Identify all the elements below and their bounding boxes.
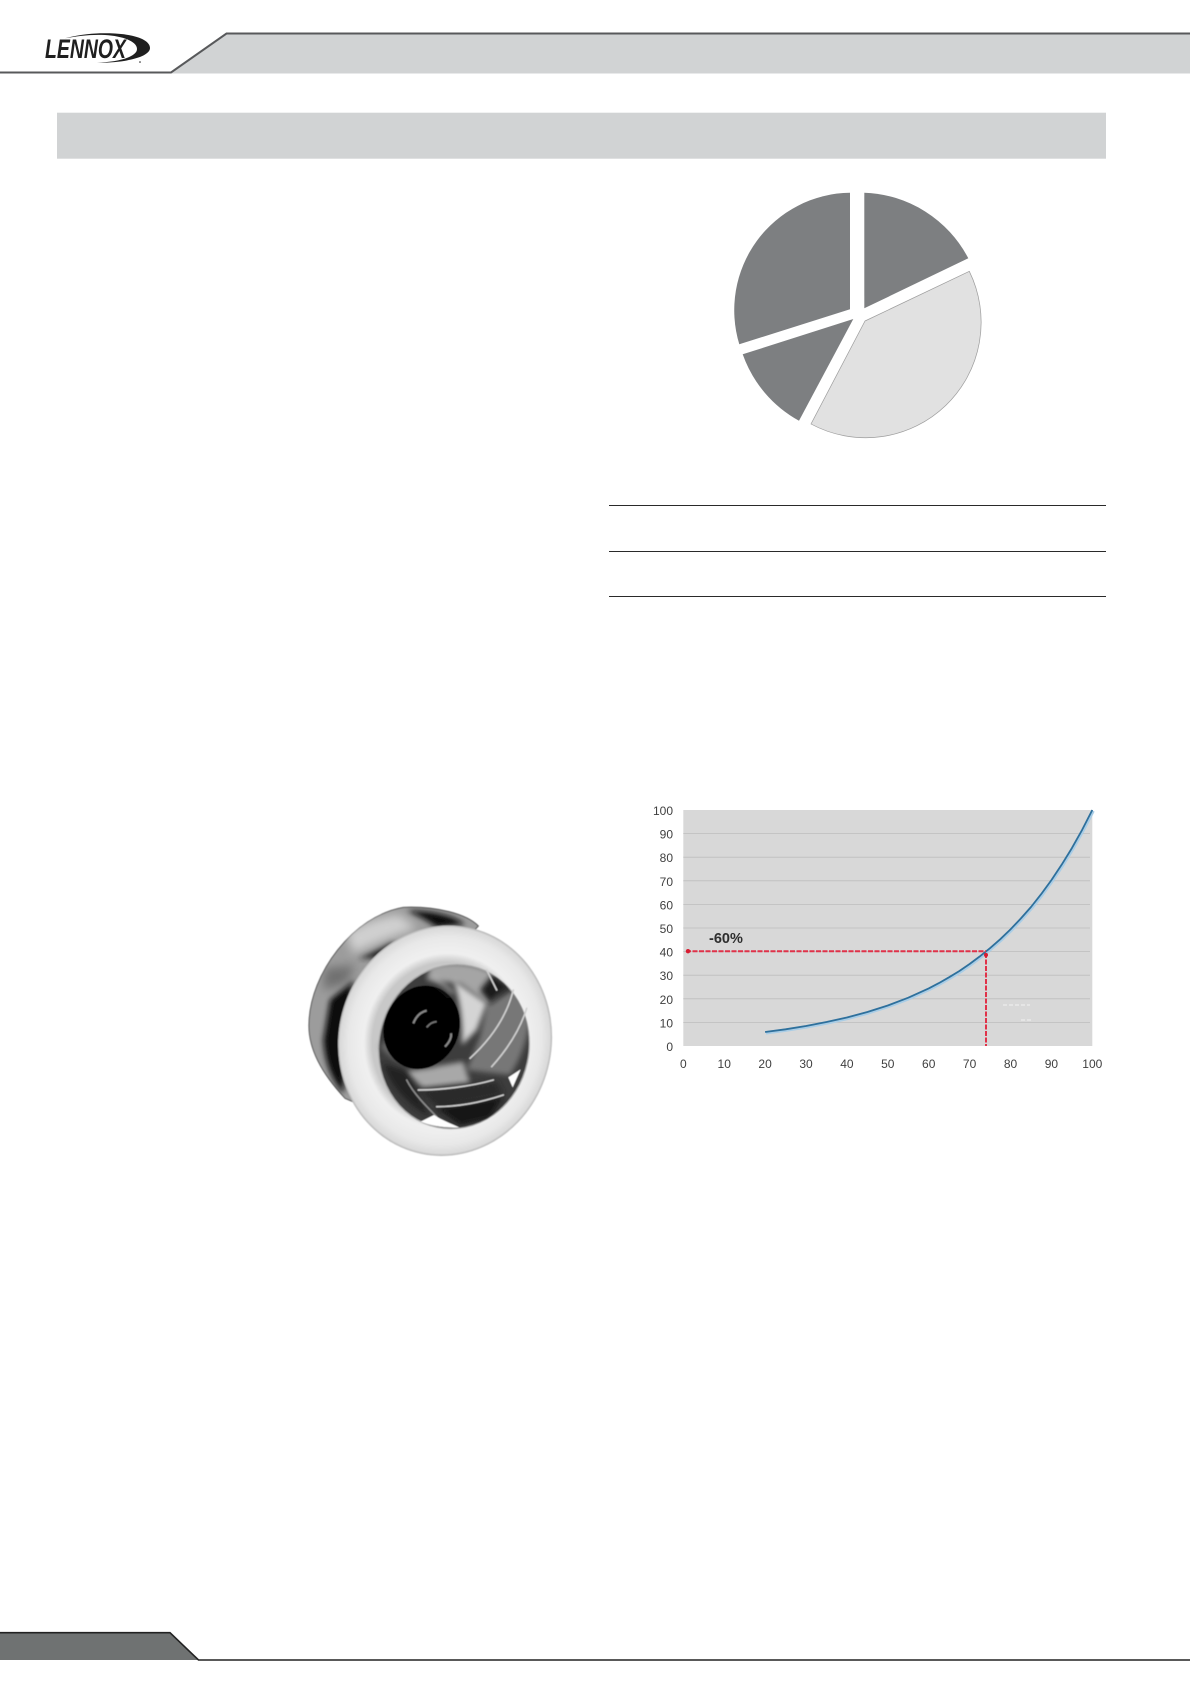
savings curve — [765, 810, 1093, 1033]
red dashed guides — [686, 951, 986, 1046]
x axis labels: 60 — [922, 1057, 936, 1071]
y axis labels: 70 — [660, 875, 673, 889]
callout: -60%: -60% — [709, 931, 743, 947]
fan blade gaps — [421, 1069, 521, 1128]
y axis labels: 0 — [666, 1040, 673, 1054]
faint label remnant — [1003, 1005, 1031, 1020]
grid lines — [683, 834, 1090, 1022]
y axis labels: 80 — [660, 851, 673, 865]
pie slice: upper left — [734, 193, 850, 344]
x axis labels: 10 — [718, 1057, 731, 1071]
section heading band — [57, 113, 1106, 159]
logo: Lennox: LENNOX — [45, 34, 127, 64]
x axis labels: 50 — [881, 1057, 895, 1071]
fan inner opening — [378, 964, 530, 1130]
y axis labels: 40 — [660, 946, 673, 960]
fan blade highlights — [407, 970, 527, 1117]
header bar — [0, 34, 1190, 74]
line chart — [653, 804, 1103, 1071]
y axis labels: 20 — [660, 993, 673, 1007]
y axis labels — [653, 804, 673, 1054]
pie chart — [734, 193, 981, 438]
x axis labels — [680, 1057, 1103, 1071]
x axis labels: 80 — [1004, 1057, 1017, 1071]
x axis labels: 40 — [840, 1057, 854, 1071]
y axis labels: 90 — [660, 828, 673, 842]
x axis labels: 90 — [1045, 1057, 1058, 1071]
guide markers — [686, 949, 988, 957]
x axis labels: 100 — [1082, 1057, 1103, 1071]
x axis labels: 0 — [680, 1057, 687, 1071]
pie slice: large light — [811, 271, 981, 438]
y axis labels: 60 — [660, 898, 673, 912]
y axis labels: 50 — [660, 922, 673, 936]
plot background — [683, 810, 1092, 1046]
fan photo — [308, 906, 553, 1156]
fan front ring — [317, 905, 573, 1176]
y axis labels: 100 — [653, 804, 673, 818]
y axis labels: 10 — [660, 1016, 673, 1030]
x axis labels: 30 — [799, 1057, 813, 1071]
pie slice: lower left — [743, 319, 853, 421]
x axis labels: 70 — [963, 1057, 977, 1071]
fan back housing — [309, 907, 478, 1103]
table rules — [609, 505, 1106, 597]
fan hub — [370, 973, 474, 1082]
y axis labels: 30 — [660, 969, 673, 983]
pie slice: upper right — [864, 193, 968, 308]
footer bar — [0, 1633, 1190, 1660]
x axis labels: 20 — [758, 1057, 772, 1071]
